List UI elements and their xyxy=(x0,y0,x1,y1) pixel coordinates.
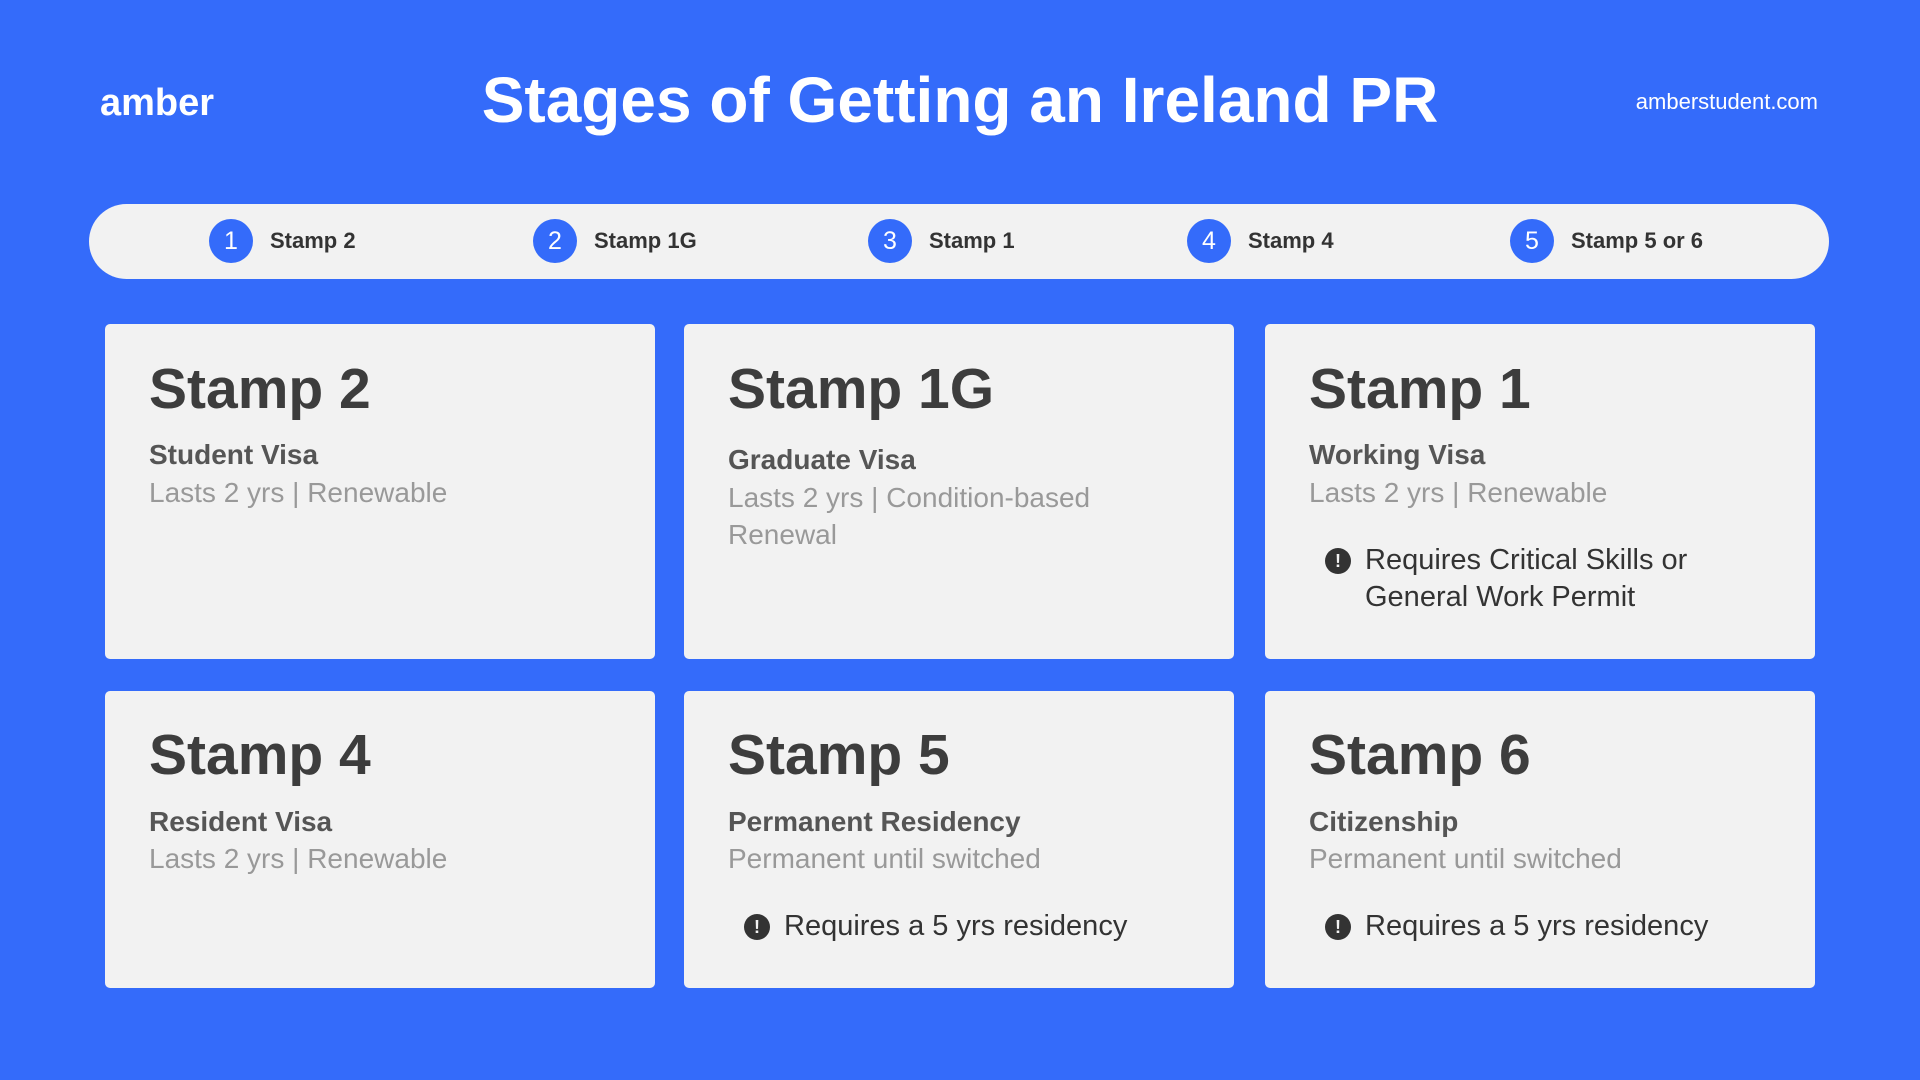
note: residency: Requires a 5 yrs residency xyxy=(1365,910,1708,942)
card: Stamp 1: Lasts 2 yrs | Renewable xyxy=(1309,477,1607,508)
card: Stamp 2: Student Visa xyxy=(149,439,318,470)
card: Stamp 2: Stamp 2 xyxy=(149,357,371,421)
step 3 xyxy=(868,219,1015,263)
logo: amber: amber xyxy=(100,82,214,124)
card: Stamp 1G: Lasts 2 yrs | Condition-based Renewal xyxy=(728,482,1090,550)
card: Stamp 1G: Graduate Visa xyxy=(728,444,916,475)
card: Stamp 6: Citizenship xyxy=(1309,806,1458,837)
note: work permit: Requires Critical Skills or General Work Permit xyxy=(1365,544,1687,613)
step 5: Stamp 5 or 6 xyxy=(1571,228,1703,253)
step 5 xyxy=(1510,219,1703,263)
card: Stamp 2: Lasts 2 yrs | Renewable xyxy=(149,477,447,508)
card: Stamp 5: Permanent until switched xyxy=(728,843,1041,874)
step 1 xyxy=(209,219,356,263)
card: Stamp 1G: Stamp 1G xyxy=(728,357,994,421)
step 1: Stamp 2 xyxy=(270,228,356,253)
card: Stamp 5: Stamp 5 xyxy=(728,723,950,787)
card: Stamp 2 xyxy=(105,324,655,659)
card: Stamp 1: Stamp 1 xyxy=(1309,357,1531,421)
card: Stamp 6: Stamp 6 xyxy=(1309,723,1531,787)
progress pill xyxy=(89,204,1829,279)
note: work permit: ! xyxy=(1335,551,1341,571)
note: residency: ! xyxy=(1335,917,1341,937)
step 2: 2 xyxy=(548,227,562,255)
card: Stamp 4: Resident Visa xyxy=(149,806,332,837)
step 2: Stamp 1G xyxy=(594,228,697,253)
step 1: 1 xyxy=(224,227,238,255)
card: Stamp 5 xyxy=(684,691,1234,988)
note: residency: ! xyxy=(754,917,760,937)
card: Stamp 6 xyxy=(1265,691,1815,988)
website url: amberstudent.com xyxy=(1636,89,1818,114)
card: Stamp 5: Permanent Residency xyxy=(728,806,1021,837)
card: Stamp 6: Permanent until switched xyxy=(1309,843,1622,874)
card: Stamp 4: Stamp 4 xyxy=(149,723,371,787)
step 4: 4 xyxy=(1202,227,1216,255)
card: Stamp 1 xyxy=(1265,324,1815,659)
card: Stamp 1: Working Visa xyxy=(1309,439,1485,470)
step 3: Stamp 1 xyxy=(929,228,1015,253)
card: Stamp 4: Lasts 2 yrs | Renewable xyxy=(149,843,447,874)
step 4 xyxy=(1187,219,1334,263)
step 4: Stamp 4 xyxy=(1248,228,1334,253)
card: Stamp 1G xyxy=(684,324,1234,659)
step 2 xyxy=(533,219,697,263)
note: residency: Requires a 5 yrs residency xyxy=(784,910,1127,942)
card: Stamp 4 xyxy=(105,691,655,988)
title: Stages of Getting an Ireland PR xyxy=(482,64,1438,136)
step 3: 3 xyxy=(883,227,897,255)
step 5: 5 xyxy=(1525,227,1539,255)
